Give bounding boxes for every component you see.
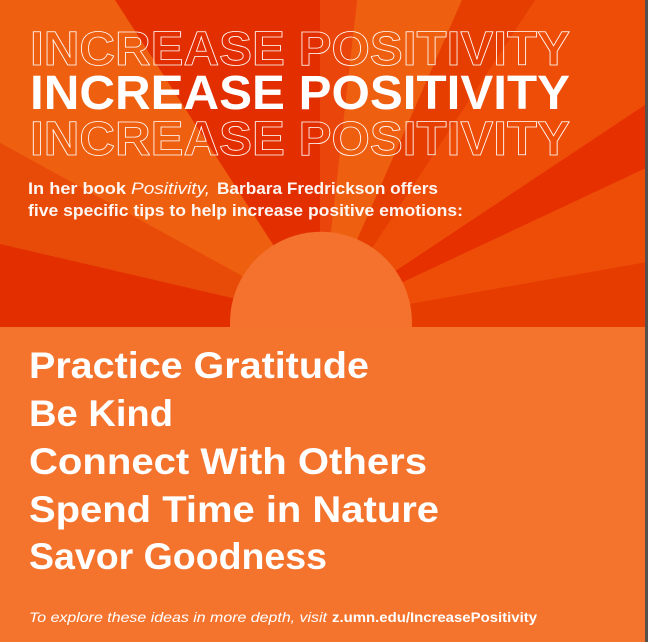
title: outlined bottom line: INCREASE POSITIVITY: [30, 113, 570, 166]
tip: connect with others: Connect With Others: [29, 441, 427, 482]
intro text: five specific tips to help increase positive emotions:: [28, 201, 463, 220]
panel: lower tips background: [0, 327, 648, 642]
list of five tips: [29, 345, 439, 577]
tip: practice gratitude: Practice Gratitude: [29, 345, 369, 386]
footer link text: z.umn.edu/IncreasePositivity: [332, 609, 537, 625]
tip: savor goodness: Savor Goodness: [29, 536, 327, 577]
intro text: Barbara Fredrickson offers: [217, 179, 438, 198]
tip: spend time in nature: Spend Time in Nature: [29, 489, 439, 530]
intro text: In her book: [28, 179, 127, 198]
intro text: [28, 179, 463, 220]
title: outlined top line: INCREASE POSITIVITY: [30, 23, 570, 76]
title: solid middle line: INCREASE POSITIVITY: [30, 67, 570, 120]
intro text: Positivity,: [131, 179, 210, 198]
icon: rising sun: [230, 232, 412, 327]
tip: be kind: Be Kind: [29, 393, 173, 434]
footer link text: [29, 609, 537, 625]
footer link text: To explore these ideas in more depth, visit: [29, 609, 328, 625]
panel: sunburst background: [0, 0, 648, 328]
